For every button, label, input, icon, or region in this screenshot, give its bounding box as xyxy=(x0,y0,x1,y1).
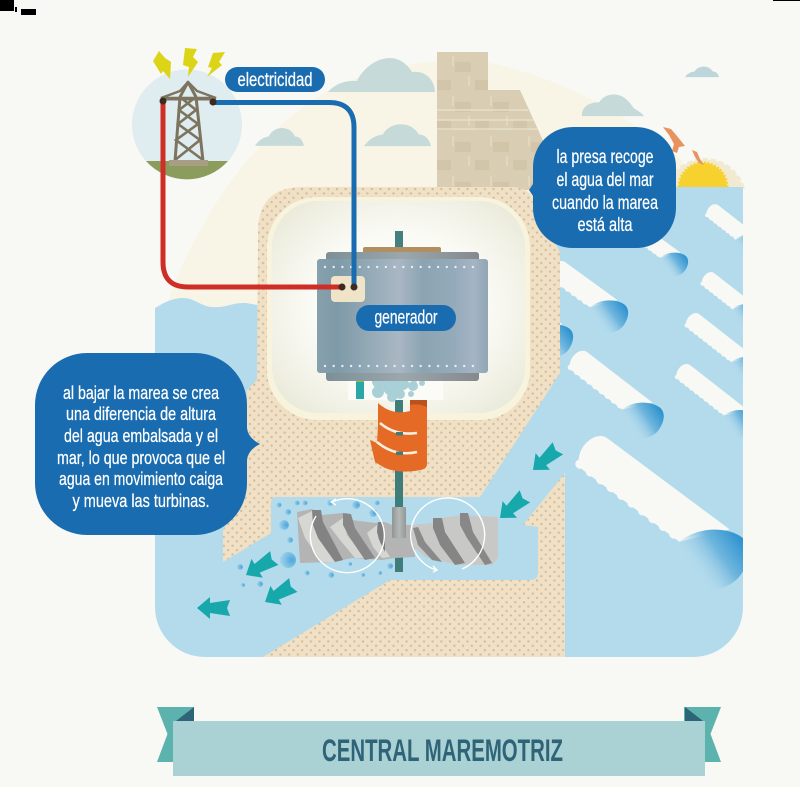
callout: al bajar la marea: del agua embalsada y el xyxy=(64,425,218,446)
arrow: outflow 3 xyxy=(197,597,230,619)
label: electricidad xyxy=(225,67,325,92)
label: generador: generador xyxy=(374,308,438,328)
icon: pylon xyxy=(161,82,216,161)
callout: la presa recoge xyxy=(529,127,676,248)
turbine blade: right xyxy=(412,513,498,565)
callout: al bajar la marea: mar, lo que provoca que el xyxy=(57,447,225,468)
cable: red xyxy=(163,101,342,287)
callout: la presa recoge: está alta xyxy=(578,215,633,236)
rotation arrows xyxy=(310,498,485,573)
callout: al bajar la marea: una diferencia de altura xyxy=(66,403,217,424)
wave: right middle xyxy=(684,313,743,375)
icon: lightning bolts xyxy=(153,48,225,79)
wave: under callout xyxy=(644,239,688,276)
wave: top right xyxy=(705,204,743,246)
wave: medium centre xyxy=(568,350,664,438)
scan artifacts xyxy=(0,0,800,15)
sea water xyxy=(155,187,743,657)
turbine blade: left xyxy=(297,509,415,563)
wave: right lower xyxy=(674,364,743,438)
title banner xyxy=(157,707,721,776)
waves xyxy=(560,204,743,588)
arrow: outflow 1 xyxy=(240,549,280,584)
bubbles around turbine xyxy=(237,500,393,587)
wave: by the wall xyxy=(560,260,628,332)
wave: large xyxy=(575,436,743,588)
foam below generator xyxy=(348,373,443,402)
shaft xyxy=(395,400,403,572)
orange spiral xyxy=(370,400,427,472)
cable: blue xyxy=(213,102,354,287)
cable terminals xyxy=(160,98,358,290)
arrow: outflow 2 xyxy=(259,576,299,611)
generator xyxy=(317,231,488,381)
arrow: inflow lower xyxy=(493,488,532,526)
title: CENTRAL MAREMOTRIZ xyxy=(322,732,563,768)
callout: al bajar la marea: al bajar la marea se crea xyxy=(63,382,220,403)
cream hill xyxy=(165,61,682,330)
cloud group xyxy=(255,58,719,146)
sand lower xyxy=(263,473,565,657)
hub xyxy=(392,507,406,538)
callout: la presa recoge: el agua del mar xyxy=(556,170,654,191)
generator chamber xyxy=(267,197,530,420)
turbine xyxy=(297,498,498,573)
sun xyxy=(667,159,743,187)
label: electricidad: electricidad xyxy=(238,70,312,91)
brick dam wall xyxy=(437,52,545,190)
callout: la presa recoge: la presa recoge xyxy=(556,147,654,168)
callout: al bajar la marea xyxy=(35,353,260,535)
sand upper xyxy=(223,187,560,562)
callout: la presa recoge: cuando la marea xyxy=(552,193,658,214)
birds xyxy=(663,127,704,165)
arrow: inflow upper xyxy=(526,440,565,478)
callout: al bajar la marea: agua en movimiento caiga xyxy=(59,468,224,489)
label: generador xyxy=(356,305,456,331)
connector box xyxy=(331,276,365,302)
sky circle with pylon xyxy=(132,48,242,180)
wave: hidden by sand xyxy=(560,322,574,356)
callout: al bajar la marea: y mueva las turbinas. xyxy=(72,490,210,511)
wave: upper right xyxy=(700,272,743,320)
